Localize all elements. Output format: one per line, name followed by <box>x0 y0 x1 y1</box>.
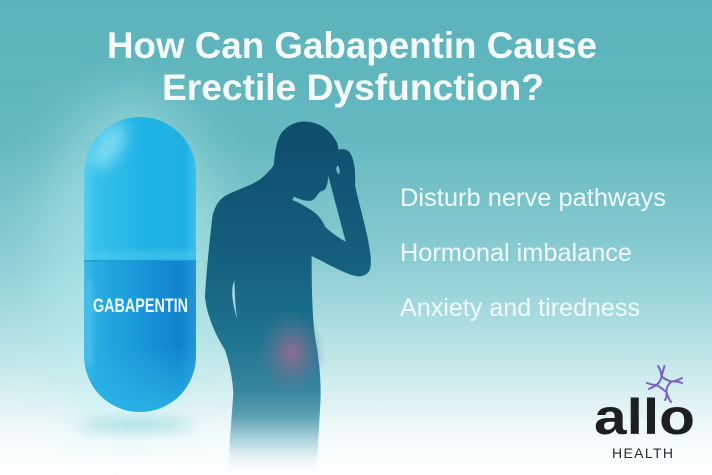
title: Erectile Dysfunction? <box>162 66 544 108</box>
symptom 3: Anxiety and tiredness <box>400 294 640 322</box>
man silhouette <box>205 122 371 475</box>
capsule label: GABAPENTIN <box>93 296 188 317</box>
pain glow <box>258 311 325 394</box>
symptom 1: Disturb nerve pathways <box>400 184 666 212</box>
capsule <box>82 117 196 412</box>
logo icon: neuron <box>647 366 682 402</box>
logo wordmark: allo <box>594 389 695 445</box>
title <box>107 24 597 108</box>
logo: allo health <box>594 366 695 461</box>
pill glow <box>40 95 220 435</box>
capsule lower half <box>84 261 196 412</box>
symptom list <box>400 184 666 322</box>
logo subtitle: HEALTH <box>612 445 673 461</box>
pill shadow <box>77 419 193 431</box>
symptom 2: Hormonal imbalance <box>400 239 632 267</box>
title: How Can Gabapentin Cause <box>107 24 597 66</box>
capsule upper half <box>84 117 196 261</box>
